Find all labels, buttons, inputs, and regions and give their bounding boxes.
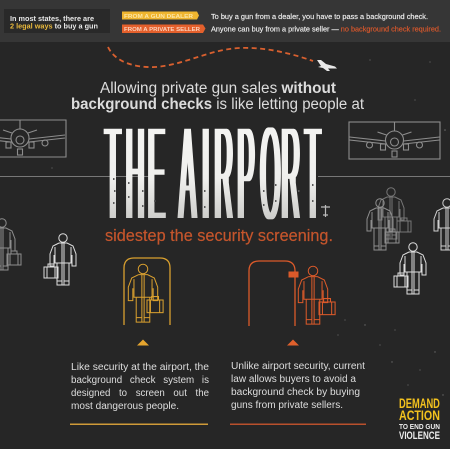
text: private seller rule: Anyone can buy from a private seller — no background check required. [211,26,441,34]
title speckle [113,178,314,208]
text: airport security: most dangerous people. [71,401,179,412]
icon: right airplane panel [349,122,440,159]
text: dealer rule: To buy a gun from a dealer, you have to pass a background check. [211,14,428,21]
text: airport security [71,362,210,412]
text: current law: background check by buying [231,387,360,398]
icon: gold screening gate with person [124,258,170,325]
arrow: gold marker [137,340,149,346]
subtitle: sidestep the security screening. [105,227,333,245]
text: current law [231,361,365,411]
text: airport security: designed to screen out the [71,388,210,399]
intro text [71,80,365,113]
horizon lines [0,176,450,178]
text: current law: Unlike airport security, current [231,361,365,372]
people: right group [367,188,450,294]
callout: 2 legal ways: 2 legal ways to buy a gun [10,24,98,30]
person: white left [44,234,76,285]
logo: demand action: DEMAND [399,397,440,412]
person: back grey [378,188,411,239]
icon: left airplane panel [0,120,66,157]
text: current law: guns from private sellers. [231,400,343,411]
person: white right [394,243,426,294]
callout: 2 legal ways: In most states, there are [10,16,94,23]
tag: from a private seller: FROM A PRIVATE SELLER [124,27,200,33]
tag: from a gun dealer [122,12,199,20]
text: current law: law allows buyers to avoid a [231,374,357,385]
person: right edge [434,199,450,250]
tag: from a gun dealer: FROM A GUN DEALER [124,14,193,20]
icon: small plane [317,60,337,71]
intro text: background checks is like letting people at [71,96,365,113]
person: cut off left [0,219,21,270]
arrow: orange marker [287,340,299,346]
logo: demand action: VIOLENCE [399,429,440,441]
text: airport security: Like security at the airport, the [71,362,210,373]
rule: gold [70,424,208,425]
text: airport security: background check system is [71,375,209,386]
title: THE AIRPORT [105,97,321,250]
arrow: dashed flight path [108,47,313,67]
logo: demand action [399,397,440,441]
tag: from a private seller [122,24,206,33]
panel: top band [0,0,450,42]
logo: demand action: TO END GUN [399,423,440,431]
icon: orange gate with person bypassing [249,261,335,326]
icon: tiny plane mark [321,205,330,217]
rule: orange [230,424,366,425]
logo: demand action: ACTION [399,409,440,424]
intro text: Allowing private gun sales without [100,80,336,97]
people: left group [0,219,76,285]
callout: 2 legal ways [4,9,110,33]
speckle texture [51,59,446,396]
person: front grey [367,199,399,250]
